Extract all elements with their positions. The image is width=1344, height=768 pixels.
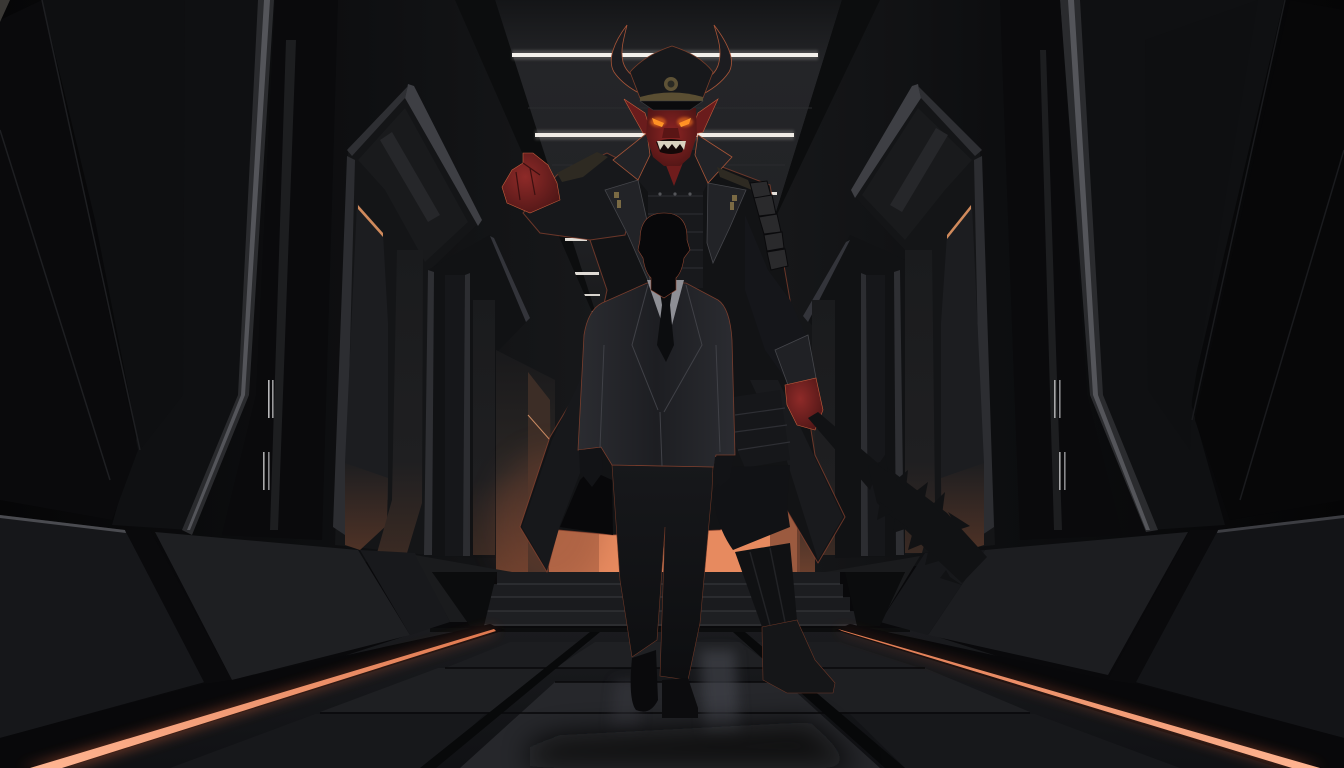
stairs — [497, 572, 840, 584]
officer cap — [630, 46, 713, 110]
fist — [502, 153, 560, 213]
dark collar behind neck — [638, 150, 708, 192]
lapels — [605, 180, 650, 285]
head silhouette — [638, 213, 690, 298]
horns — [611, 25, 731, 97]
near panels — [0, 0, 262, 530]
floor reflections — [700, 650, 740, 735]
left wall — [0, 0, 600, 580]
shoes — [631, 650, 658, 712]
orange glow at end of corridor — [495, 450, 800, 590]
faceless man in suit — [578, 213, 735, 718]
demon officer — [502, 25, 987, 693]
floor shadow — [530, 722, 860, 768]
coat — [520, 162, 845, 572]
right epaulette and armour plates — [717, 167, 788, 270]
floor light strips — [20, 628, 1324, 768]
right arm — [745, 215, 808, 385]
trousers — [612, 465, 713, 680]
shirt and tie — [647, 280, 684, 340]
second portal — [335, 90, 480, 555]
epaulette left — [557, 152, 608, 182]
demon head — [624, 99, 718, 166]
coat flaps — [522, 370, 590, 570]
chest armour — [648, 188, 703, 288]
right kerb panels — [825, 515, 1344, 768]
left kerb panels — [0, 515, 512, 768]
raised arm — [523, 153, 640, 240]
floor tiles — [445, 642, 590, 668]
jacket — [578, 283, 735, 467]
hands — [579, 448, 603, 487]
far corridor — [496, 350, 555, 572]
ceiling with lights — [450, 0, 880, 330]
ceiling lights — [512, 50, 818, 327]
right portal — [853, 90, 995, 555]
cuff — [775, 335, 816, 385]
floor — [0, 572, 1344, 768]
demon leg and boot — [713, 465, 835, 693]
lower armour plates — [733, 390, 790, 468]
spiked club — [808, 412, 987, 585]
neck — [664, 160, 684, 186]
club hand — [785, 378, 823, 430]
third portal — [428, 235, 528, 558]
right wall — [760, 0, 1344, 580]
